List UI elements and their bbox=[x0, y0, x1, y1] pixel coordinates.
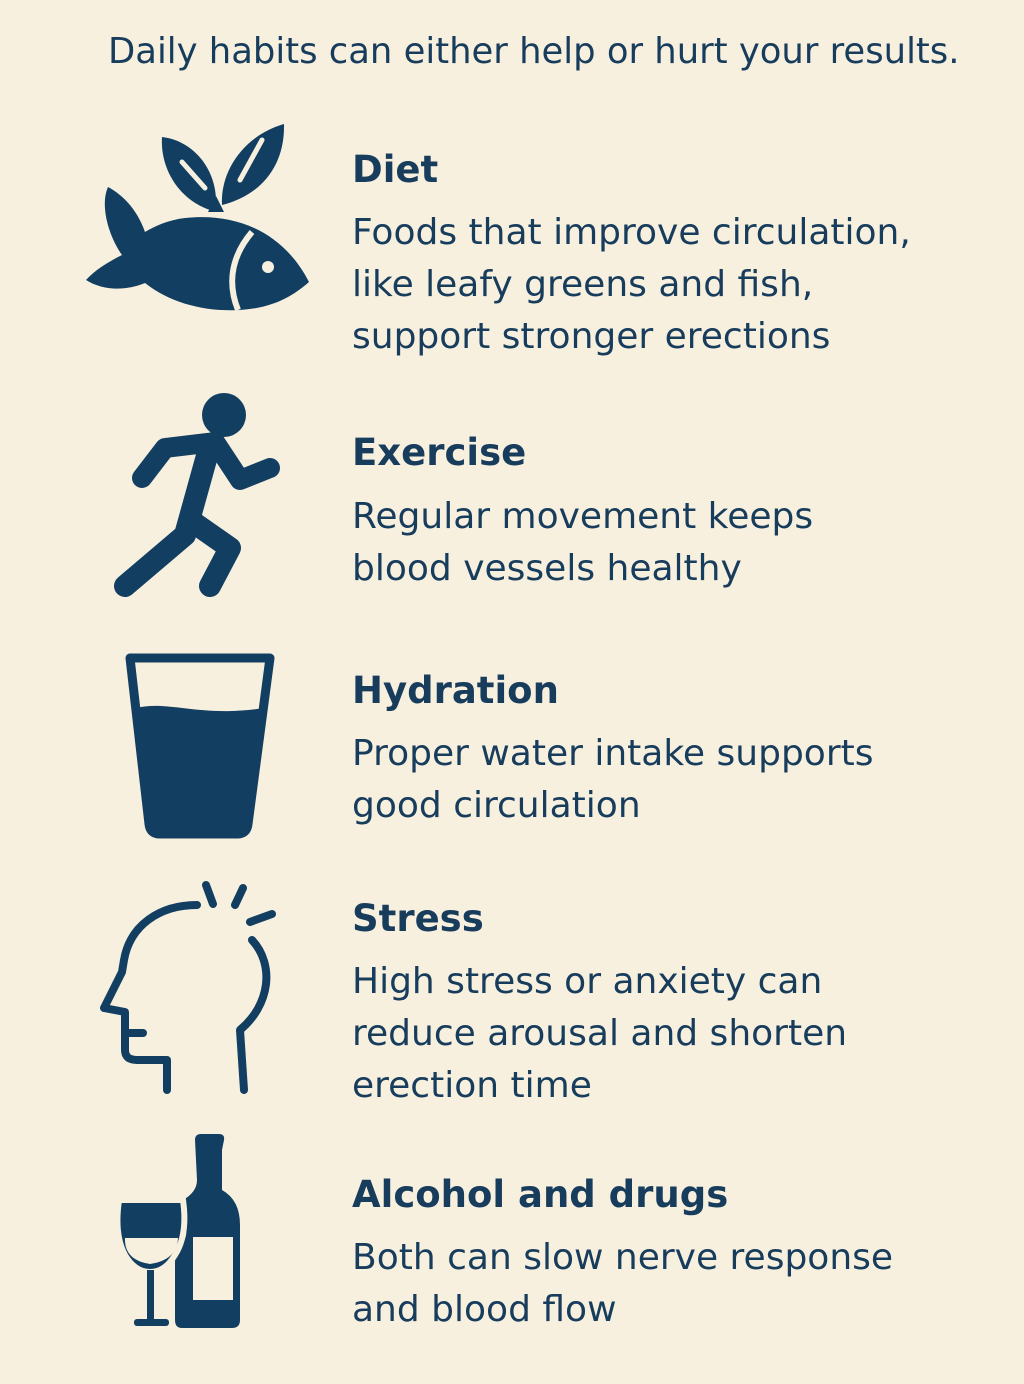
text: alcohol bbox=[352, 1237, 893, 1330]
text: diet: support stronger erections bbox=[352, 316, 830, 357]
text: diet: like leafy greens and fish, bbox=[352, 264, 813, 305]
text: alcohol: and blood flow bbox=[352, 1289, 617, 1330]
text: stress: reduce arousal and shorten bbox=[352, 1013, 847, 1054]
text: exercise: blood vessels healthy bbox=[352, 548, 742, 589]
text: hydration: Proper water intake supports bbox=[352, 733, 874, 774]
text: exercise bbox=[352, 496, 813, 589]
text: diet bbox=[352, 212, 911, 357]
text: alcohol: Both can slow nerve response bbox=[352, 1237, 893, 1278]
heading: Exercise: Exercise bbox=[352, 431, 526, 474]
text: hydration: good circulation bbox=[352, 785, 641, 826]
text: stress: High stress or anxiety can bbox=[352, 961, 822, 1002]
text: exercise: Regular movement keeps bbox=[352, 496, 813, 537]
heading: Stress: Stress bbox=[352, 897, 484, 940]
heading: Hydration: Hydration bbox=[352, 669, 559, 712]
heading: Alcohol and drugs: Alcohol and drugs bbox=[352, 1173, 728, 1216]
heading: Diet: Diet bbox=[352, 148, 438, 191]
text: hydration bbox=[352, 733, 874, 826]
text: stress: erection time bbox=[352, 1065, 592, 1106]
text: diet: Foods that improve circulation, bbox=[352, 212, 911, 253]
title: Daily habits can either help or hurt your results. bbox=[108, 31, 959, 72]
text: stress bbox=[352, 961, 847, 1106]
